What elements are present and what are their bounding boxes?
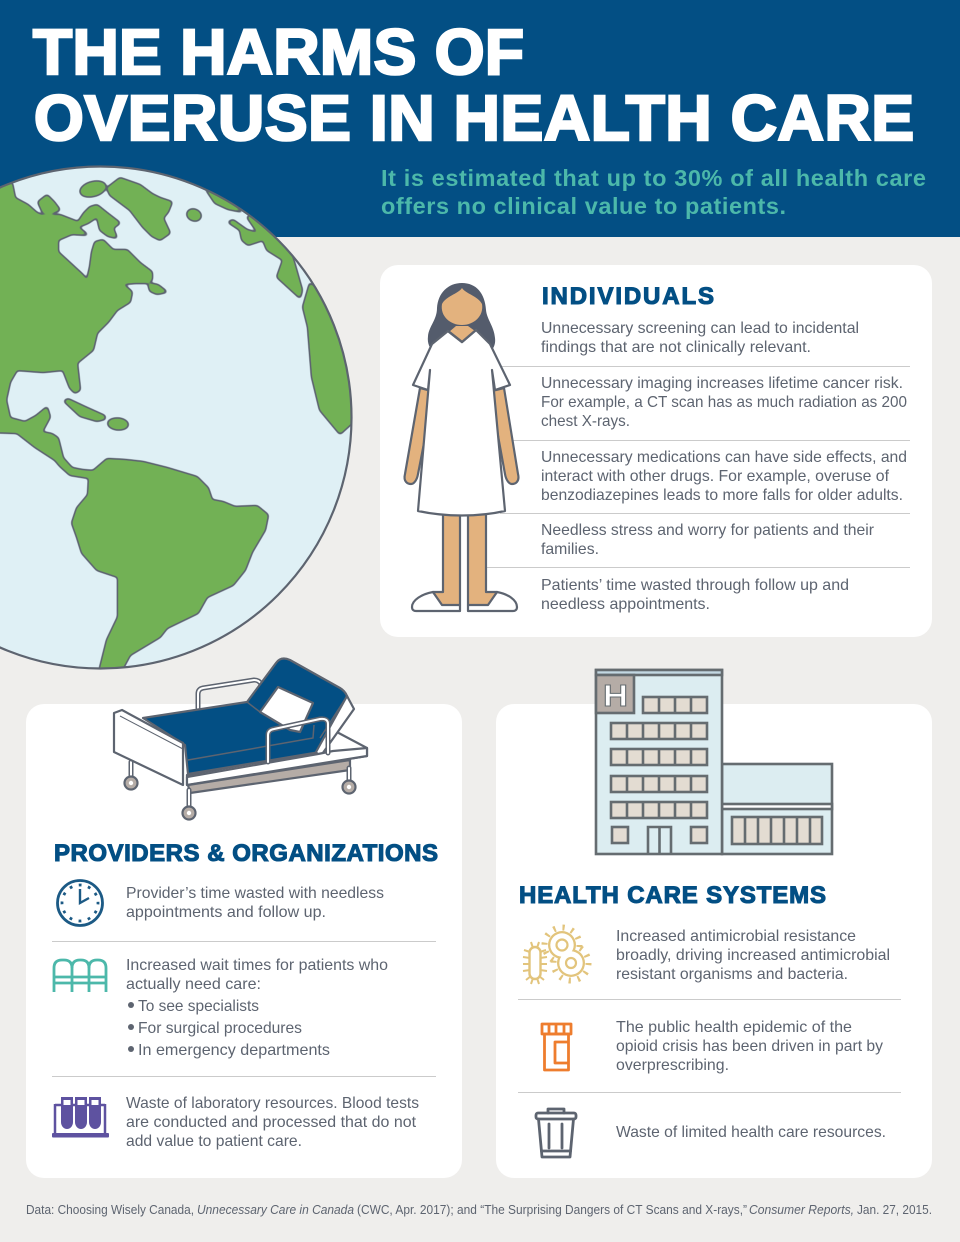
hospital building illustration — [596, 670, 832, 854]
header band — [0, 0, 960, 237]
providers text 2 — [126, 957, 388, 1059]
systems text 2: The public health epidemic of the — [616, 1019, 852, 1036]
providers text 1 — [126, 885, 384, 921]
providers text 2: In emergency departments — [138, 1042, 330, 1059]
title: THE HARMS OF — [33, 16, 524, 88]
individuals text list: Unnecessary screening can lead to incidental — [541, 320, 859, 337]
providers text 3: add value to patient care. — [126, 1133, 302, 1150]
providers text 2: actually need care: — [126, 976, 261, 993]
providers text 1: Provider’s time wasted with needless — [126, 885, 384, 902]
individuals text list: For example, a CT scan has as much radiation as 200 — [541, 394, 907, 411]
individuals text list: findings that are not clinically relevant. — [541, 339, 811, 356]
data source footer: (CWC, Apr. 2017); and “The Surprising Dangers of CT Scans and X-rays,” — [357, 1203, 747, 1217]
individuals text list: benzodiazepines leads to more falls for older adults. — [541, 487, 903, 504]
data source footer: Data: Choosing Wisely Canada, — [26, 1203, 194, 1217]
data source footer: Consumer Reports, — [749, 1203, 854, 1217]
data source footer: Unnecessary Care in Canada — [197, 1203, 354, 1217]
providers text 3: are conducted and processed that do not — [126, 1114, 417, 1131]
systems text 1: broadly, driving increased antimicrobial — [616, 947, 890, 964]
data source footer: Jan. 27, 2015. — [857, 1203, 932, 1217]
individuals card background — [380, 265, 932, 637]
individuals text list: needless appointments. — [541, 596, 710, 613]
systems heading: HEALTH CARE SYSTEMS — [519, 882, 826, 909]
individuals text list: Patients’ time wasted through follow up and — [541, 577, 849, 594]
data source footer — [26, 1203, 932, 1217]
panel: health care systems — [496, 670, 932, 1178]
hospital bed illustration — [114, 659, 367, 820]
icon: test tubes — [52, 1097, 109, 1138]
systems text 3: Waste of limited health care resources. — [616, 1124, 886, 1141]
subtitle — [381, 165, 926, 219]
providers card background — [26, 704, 462, 1178]
providers text 3: Waste of laboratory resources. Blood tests — [126, 1095, 419, 1112]
subtitle: offers no clinical value to patients. — [381, 193, 786, 219]
individuals text list: interact with other drugs. For example, overuse of — [541, 468, 890, 485]
systems text 2 — [616, 1019, 883, 1074]
individuals text list — [541, 320, 907, 613]
individuals text list: Unnecessary imaging increases lifetime cancer risk. — [541, 375, 903, 392]
globe illustration — [0, 166, 360, 680]
systems text 2: overprescribing. — [616, 1057, 729, 1074]
providers text 3 — [126, 1095, 419, 1150]
systems text 1: Increased antimicrobial resistance — [616, 928, 856, 945]
systems text 1 — [616, 928, 890, 983]
providers heading: PROVIDERS & ORGANIZATIONS — [54, 840, 438, 867]
icon: bacteria — [523, 928, 588, 984]
icon: clock — [58, 880, 102, 926]
subtitle: It is estimated that up to 30% of all health care — [381, 165, 926, 191]
title — [33, 16, 914, 154]
individuals text list: Needless stress and worry for patients and their — [541, 522, 875, 539]
providers text 2: Increased wait times for patients who — [126, 957, 388, 974]
individuals text list: Unnecessary medications can have side effects, and — [541, 449, 907, 466]
hospital building illustration: H — [603, 678, 628, 713]
providers text 1: appointments and follow up. — [126, 904, 326, 921]
providers text 2: For surgical procedures — [138, 1020, 302, 1037]
icon: pill bottle — [542, 1024, 571, 1070]
providers text 2: To see specialists — [138, 998, 259, 1015]
systems text 1: resistant organisms and bacteria. — [616, 966, 848, 983]
patient figure — [405, 283, 518, 611]
panel: individuals — [380, 265, 932, 637]
systems text 2: opioid crisis has been driven in part by — [616, 1038, 883, 1055]
individuals text list: families. — [541, 541, 599, 558]
systems card background — [496, 704, 932, 1178]
individuals text list: chest X-rays. — [541, 413, 630, 430]
panel: providers and organizations — [26, 659, 462, 1178]
icon: waiting room chairs — [54, 960, 106, 992]
title: OVERUSE IN HEALTH CARE — [34, 82, 914, 154]
icon: trash can — [536, 1109, 576, 1157]
individuals heading: INDIVIDUALS — [542, 283, 714, 310]
